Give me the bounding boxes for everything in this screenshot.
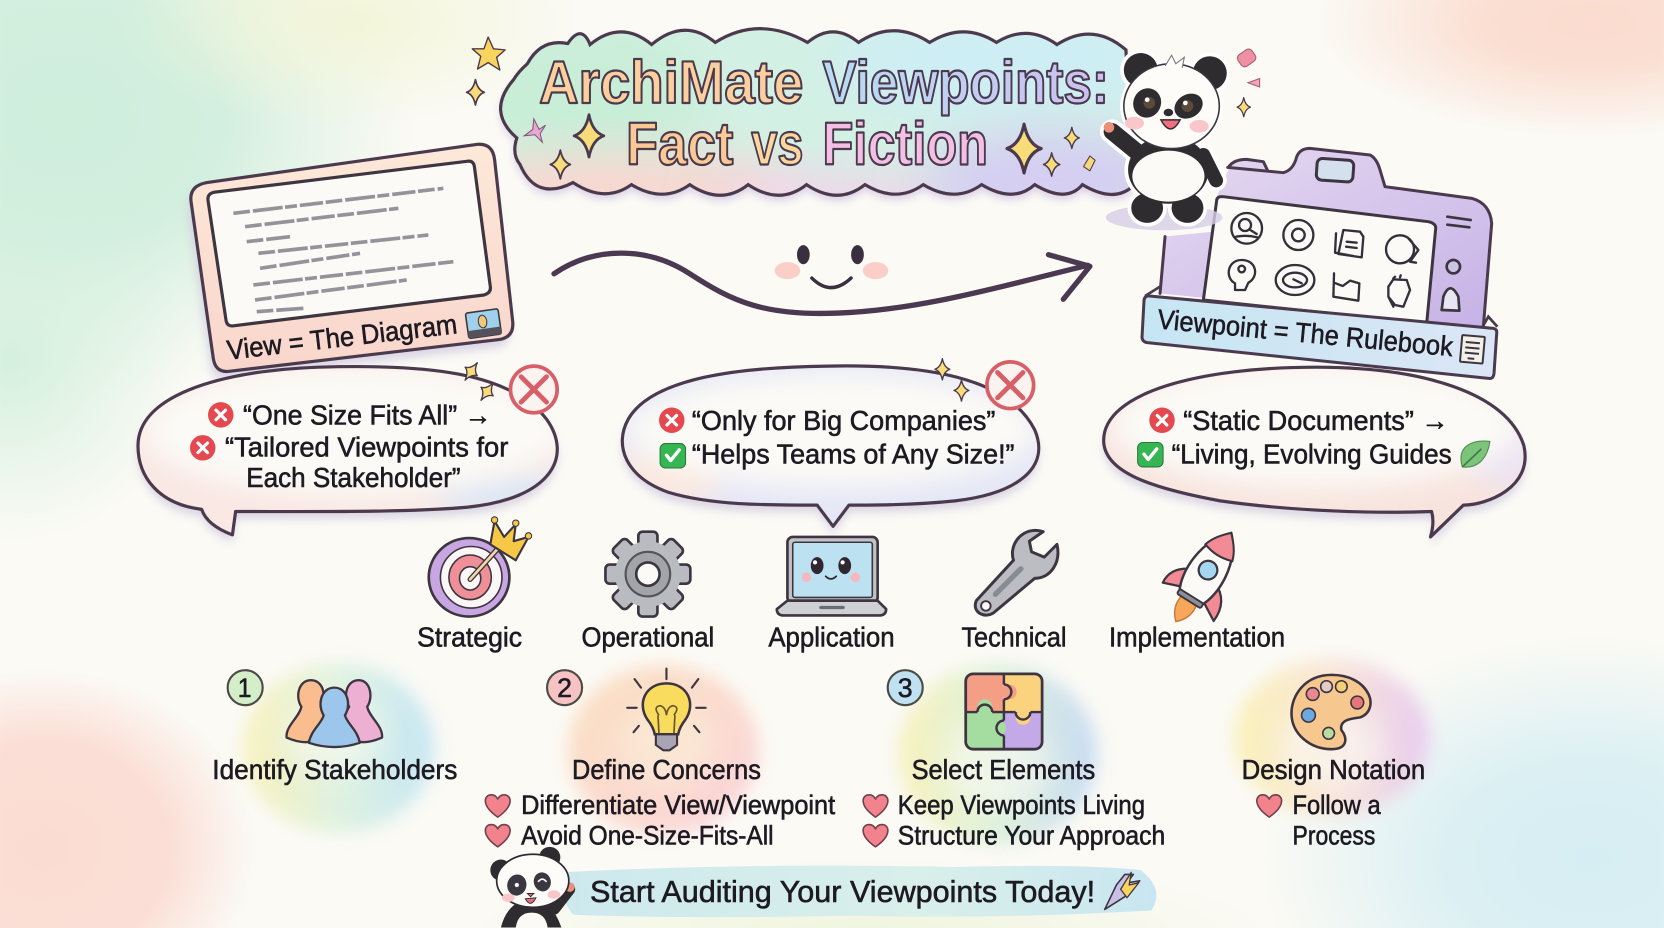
process step 1 (212, 663, 457, 833)
myth text: “Living, Evolving Guides (1172, 439, 1452, 470)
title text (539, 48, 1109, 177)
call to action banner (561, 866, 1156, 917)
rulebook label: Viewpoint = The Rulebook (1156, 303, 1455, 362)
floating decorations near panda (1236, 47, 1260, 117)
title text: ArchiMate (539, 48, 803, 116)
panel: view tablet (188, 144, 513, 380)
icon: rulebook (1460, 335, 1485, 364)
label: Identify Stakeholders (212, 754, 457, 785)
mascot: small panda (490, 847, 575, 927)
title text: Fiction (822, 109, 988, 177)
process step 3 (863, 664, 1165, 851)
process step 2 (485, 665, 836, 851)
icon: puzzle (964, 672, 1044, 751)
myth text: Each Stakeholder” (246, 462, 461, 493)
rainbow blob (243, 663, 434, 833)
screen with blurred text (208, 161, 490, 326)
panel: myth bubble 1 (127, 358, 584, 542)
icon: stakeholders (286, 680, 382, 747)
badge 2 (547, 670, 582, 705)
icon: wrench (975, 530, 1058, 615)
screen icons (1229, 213, 1418, 307)
bullet: Process (1293, 821, 1375, 851)
title banner (466, 27, 1134, 204)
bullet (1257, 790, 1381, 851)
red cross stamp (510, 366, 557, 413)
badge 3 (888, 670, 923, 705)
badge 3: 3 (898, 673, 913, 703)
cloud shape (497, 27, 1134, 204)
cta text: Start Auditing Your Viewpoints Today! (590, 874, 1095, 909)
myth text: “Only for Big Companies” (692, 405, 995, 436)
smiling face (775, 245, 888, 288)
bullets: Structure Your Approach (898, 821, 1165, 851)
label: technical: Technical (961, 621, 1067, 652)
icon: light bulb (627, 669, 706, 750)
panel: viewpoint camera (1142, 148, 1497, 378)
title text: vs (751, 109, 803, 177)
wavy arrow view to viewpoint (554, 253, 1090, 313)
bullets (863, 790, 1165, 851)
red cross stamp (987, 362, 1034, 409)
title sparkles (467, 37, 1095, 179)
myth text (1138, 405, 1490, 470)
myth text: “Helps Teams of Any Size!” (692, 439, 1015, 470)
myth text: “Tailored Viewpoints for (225, 431, 508, 462)
icon: rocket (1149, 516, 1258, 639)
camera screen (1203, 197, 1436, 323)
myth text (190, 399, 508, 493)
viewpoint types row (417, 516, 1285, 652)
panel: myth bubble 3 (1101, 366, 1528, 542)
rainbow blob (1234, 659, 1429, 816)
badge 1: 1 (238, 673, 252, 703)
icon: small picture (465, 309, 501, 338)
view label: View = The Diagram (225, 308, 459, 366)
bullets: Differentiate View/Viewpoint (521, 790, 836, 820)
rulebook band (1142, 287, 1497, 378)
title text: Viewpoints: (822, 48, 1109, 116)
icon: leaf (1461, 441, 1490, 467)
sparkles (935, 359, 969, 401)
panel: myth bubble 2 (620, 358, 1042, 533)
myth text (659, 405, 1015, 470)
icon: target with crown (429, 517, 532, 617)
bullets: Avoid One-Size-Fits-All (521, 821, 774, 851)
mascot: waving panda (1104, 53, 1227, 230)
icon: lightning pen (1105, 872, 1140, 909)
badge 2: 2 (557, 673, 572, 703)
icon: palette (1291, 675, 1371, 749)
myth text: “One Size Fits All” → (243, 399, 491, 430)
label: implementation: Implementation (1109, 621, 1285, 652)
brush band (561, 866, 1156, 917)
rainbow blob (898, 664, 1097, 845)
icon: gear (605, 532, 690, 617)
bullet: Follow a (1293, 790, 1381, 820)
label: application: Application (768, 621, 895, 652)
sparkles (459, 358, 499, 405)
label: Design Notation (1242, 754, 1425, 785)
badge 1 (228, 670, 263, 705)
icon: laptop (777, 537, 886, 615)
label: Select Elements (912, 754, 1095, 785)
myth text: “Static Documents” → (1183, 405, 1449, 436)
process step 4 (1234, 659, 1429, 851)
bullets (485, 790, 836, 851)
title text: Fact (626, 109, 733, 177)
sticker outline (1112, 53, 1227, 223)
label: operational: Operational (582, 621, 714, 652)
label: strategic: Strategic (417, 621, 522, 652)
camera body (1160, 148, 1492, 327)
peach blob (568, 665, 759, 835)
bullets: Keep Viewpoints Living (898, 790, 1145, 820)
label: Define Concerns (572, 754, 761, 785)
